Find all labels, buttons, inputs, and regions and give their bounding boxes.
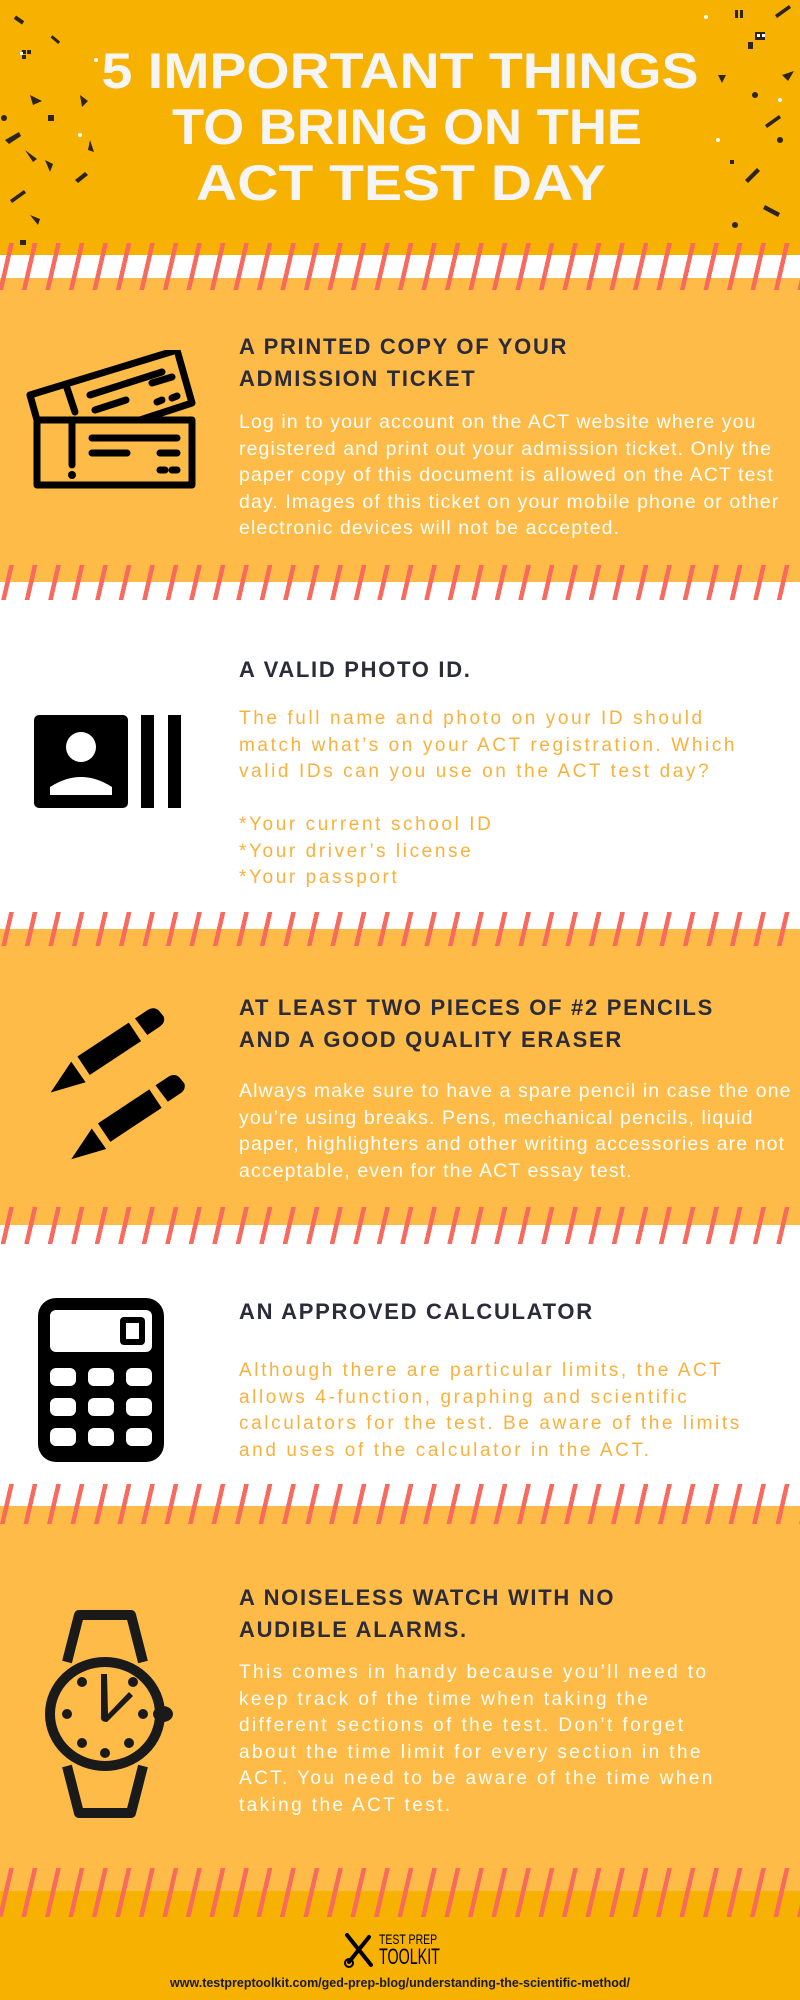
text: photo ID: The full name and photo on your ID should (239, 708, 705, 729)
title: 5 IMPORTANT THINGS (102, 43, 698, 99)
icon: photo ID (34, 715, 181, 808)
text: admission ticket: Log in to your account on the ACT website where you (239, 411, 757, 433)
logo: Test Prep Toolkit (344, 1931, 440, 1969)
text: photo ID (239, 708, 737, 888)
header background (0, 0, 800, 255)
text: photo ID: match what’s on your ACT registration. Which (239, 734, 737, 756)
text: admission ticket: electronic devices will not be accepted. (239, 517, 620, 539)
text: pencils: you’re using breaks. Pens, mechanical pencils, liquid (239, 1106, 754, 1128)
heading: calculator: AN APPROVED CALCULATOR (239, 1299, 594, 1324)
icon: watch (45, 1610, 173, 1818)
icon: pencils (50, 1008, 185, 1160)
text: calculator: calculators for the test. Be aware of the limits (239, 1413, 742, 1434)
text: photo ID: *Your current school ID (239, 814, 493, 835)
text: pencils: paper, highlighters and other writing accessories are not (239, 1133, 785, 1155)
text: photo ID: *Your driver’s license (239, 840, 473, 862)
heading: watch (239, 1585, 615, 1642)
heading: watch: A NOISELESS WATCH WITH NO (239, 1585, 615, 1610)
heading: admission ticket: ADMISSION TICKET (239, 366, 476, 391)
text: watch: ACT. You need to be aware of the time when (239, 1768, 715, 1789)
text: watch: keep track of the time when taking the (239, 1688, 650, 1710)
heading: pencils: AT LEAST TWO PIECES OF #2 PENCILS (239, 995, 714, 1020)
text: watch (239, 1662, 715, 1816)
heading: admission ticket (239, 334, 568, 391)
text: admission ticket: paper copy of this document is allowed on the ACT test (239, 464, 774, 486)
icon: admission tickets (26, 350, 196, 488)
text: watch: different sections of the test. Don’t forget (239, 1715, 685, 1736)
section 1 background (0, 278, 800, 582)
text: pencils: acceptable, even for the ACT essay test. (239, 1160, 633, 1182)
text: calculator (239, 1360, 742, 1460)
section 3 background (0, 929, 800, 1225)
heading: photo ID: A VALID PHOTO ID. (239, 657, 472, 682)
text: watch: taking the ACT test. (239, 1794, 452, 1816)
title: ACT TEST DAY (196, 155, 606, 211)
heading: pencils (239, 995, 714, 1052)
footer background (0, 1891, 800, 2000)
footer url: www.testpreptoolkit.com/ged-prep-blog/understanding-the-scientific-method/ (170, 1976, 630, 1990)
text: calculator: Although there are particular limits, the ACT (239, 1360, 724, 1381)
confetti decoration (1, 5, 794, 245)
text: pencils (239, 1080, 792, 1182)
text: pencils: Always make sure to have a spare pencil in case the one (239, 1080, 792, 1102)
text: calculator: and uses of the calculator in the ACT. (239, 1440, 652, 1460)
text: admission ticket: registered and print out your admission ticket. Only the (239, 438, 772, 460)
heading: pencils: AND A GOOD QUALITY ERASER (239, 1027, 623, 1052)
heading: admission ticket: A PRINTED COPY OF YOUR (239, 334, 568, 359)
text: watch: about the time limit for every section in the (239, 1742, 703, 1762)
text: photo ID: *Your passport (239, 867, 399, 888)
icon: calculator (38, 1298, 164, 1462)
heading: watch: AUDIBLE ALARMS. (239, 1617, 468, 1642)
text: watch: This comes in handy because you’ll need to (239, 1662, 708, 1683)
section 5 background (0, 1506, 800, 1891)
logo: Test Prep Toolkit: TEST PREP (379, 1931, 437, 1947)
title: TO BRING ON THE (172, 99, 642, 155)
text: admission ticket: day. Images of this ticket on your mobile phone or other (239, 490, 779, 512)
text: admission ticket (239, 411, 779, 539)
text: calculator: allows 4-function, graphing and scientific (239, 1386, 689, 1408)
title (102, 43, 698, 211)
logo: Test Prep Toolkit: TOOLKIT (379, 1944, 440, 1969)
text: photo ID: valid IDs can you use on the ACT test day? (239, 761, 711, 782)
